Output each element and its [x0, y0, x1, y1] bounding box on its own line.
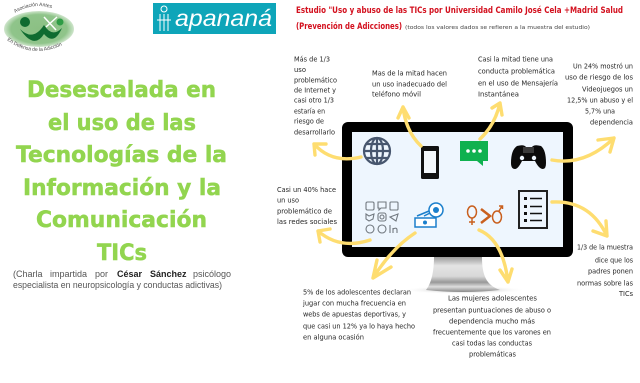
text: instant messaging: Casi la mitad tiene una	[478, 56, 553, 64]
text: parental rules: dice que los	[595, 256, 633, 264]
arrow: video games	[552, 138, 614, 161]
text: video games: uso de riesgo de los	[565, 74, 633, 82]
text: internet: de Internet y	[294, 86, 336, 94]
text: video games: dependencia	[590, 118, 633, 126]
arrow: mobile phone	[398, 107, 421, 146]
icon: game controller	[511, 145, 546, 169]
credit note: César	[117, 269, 143, 279]
icon: female greater than male	[468, 206, 502, 225]
arrow: sports betting	[373, 233, 415, 278]
text: parental rules	[577, 244, 633, 298]
logo: apananá	[153, 3, 276, 34]
icon: mobile phone	[421, 146, 439, 179]
text: sports betting: 5% de los adolescentes declaran	[303, 288, 411, 296]
title	[16, 78, 227, 266]
arrow: gender comparison	[479, 230, 512, 282]
text: social networks: Casi un 40% hace	[277, 186, 336, 194]
study heading: (todos los valores dados se refieren a la muestra del estudio)	[405, 25, 590, 31]
credit note: por	[95, 269, 108, 279]
text: gender comparison	[433, 294, 551, 358]
text: mobile phone	[372, 70, 447, 98]
credit note	[13, 269, 231, 290]
text: sports betting: jugar con mucha frecuencia en	[302, 300, 406, 308]
text: gender comparison: presentan puntuaciones de abuso o	[433, 306, 551, 314]
text: instant messaging: conducta problemática	[478, 68, 555, 76]
arrow: internet	[314, 144, 361, 159]
monitor	[342, 122, 573, 257]
credit note: Sánchez	[150, 269, 187, 279]
logo: Asociación Antes: En Defensa de la Adicción	[7, 38, 62, 51]
text: video games	[565, 62, 633, 126]
text: gender comparison: dependencia mucho más	[449, 318, 535, 326]
icon: globe	[364, 138, 390, 164]
arrow: social networks	[318, 229, 370, 243]
credit note: psicólogo	[193, 269, 231, 279]
text: internet	[294, 56, 337, 136]
text: mobile phone: un uso inadecuado del	[372, 80, 447, 88]
credit note: (Charla	[13, 269, 43, 279]
text: instant messaging: en el uso de Mensajería	[478, 80, 558, 88]
logo: Asociación Antes	[4, 2, 74, 51]
icon: football betting	[415, 203, 443, 227]
text: parental rules: 1/3 de la muestra	[577, 244, 633, 252]
text: social networks: un uso	[277, 196, 299, 204]
text: parental rules: normas sobre las	[577, 280, 633, 288]
text: instant messaging: Instantánea	[478, 90, 519, 98]
credit note: especialista en neuropsicología y conductas adictivas)	[13, 280, 222, 290]
text: social networks	[277, 186, 337, 226]
text: video games: 5,7% una	[585, 108, 615, 116]
text: social networks: problemático de	[277, 208, 332, 216]
text: gender comparison: casi todas las conductas	[452, 340, 532, 348]
logo: apananá: apananá	[175, 5, 272, 31]
title: Información y la	[23, 176, 221, 201]
icon: checklist	[519, 191, 547, 228]
text: internet: uso	[294, 66, 306, 74]
title: Tecnologías de la	[16, 143, 227, 168]
title: TICs	[97, 241, 147, 266]
text: video games: Videojuegos un	[582, 86, 633, 94]
credit note: impartida	[50, 269, 87, 279]
text: video games: Un 24% mostró un	[573, 62, 633, 70]
text: gender comparison: problemáticas	[469, 350, 516, 358]
text: sports betting: en alguna ocasión	[303, 334, 364, 342]
text: internet: casi otro 1/3	[294, 96, 334, 104]
text: social networks: las redes sociales	[277, 218, 337, 226]
text: internet: Más de 1/3	[294, 56, 330, 64]
text: instant messaging	[478, 56, 558, 98]
title: el uso de las	[48, 111, 196, 136]
study heading	[296, 5, 623, 32]
logo: Asociación Antes: Asociación Antes	[14, 2, 52, 13]
text: internet: riesgo de	[294, 118, 324, 126]
icon: social networks grid	[366, 202, 398, 233]
text: parental rules: TICs	[618, 290, 633, 298]
title: Desescalada en	[27, 78, 216, 103]
text: video games: 12,5% un abuso y el	[567, 96, 633, 104]
arrow: instant messaging	[480, 103, 502, 139]
monitor stand	[402, 257, 526, 294]
text: internet: problemático	[294, 76, 337, 84]
text: parental rules: padres ponen	[588, 268, 633, 276]
text: internet: desarrollarlo	[294, 128, 335, 136]
title: Comunicación	[36, 208, 207, 233]
icon: message bubble	[460, 141, 488, 166]
text: mobile phone: teléfono móvil	[372, 90, 421, 98]
text: gender comparison: Las mujeres adolescentes	[448, 294, 537, 302]
text: internet: estaría en	[294, 108, 325, 116]
text: mobile phone: Mas de la mitad hacen	[372, 70, 447, 78]
text: sports betting	[302, 288, 415, 342]
text: sports betting: webs de apuestas deportivas, y	[303, 310, 406, 318]
text: gender comparison: frecuentemente que los varones en	[433, 328, 551, 336]
arrow: parental rules	[552, 202, 607, 236]
study heading: (Prevención de Adicciones)	[296, 21, 402, 32]
text: sports betting: que casi un 12% ya lo haya hecho	[303, 322, 415, 330]
